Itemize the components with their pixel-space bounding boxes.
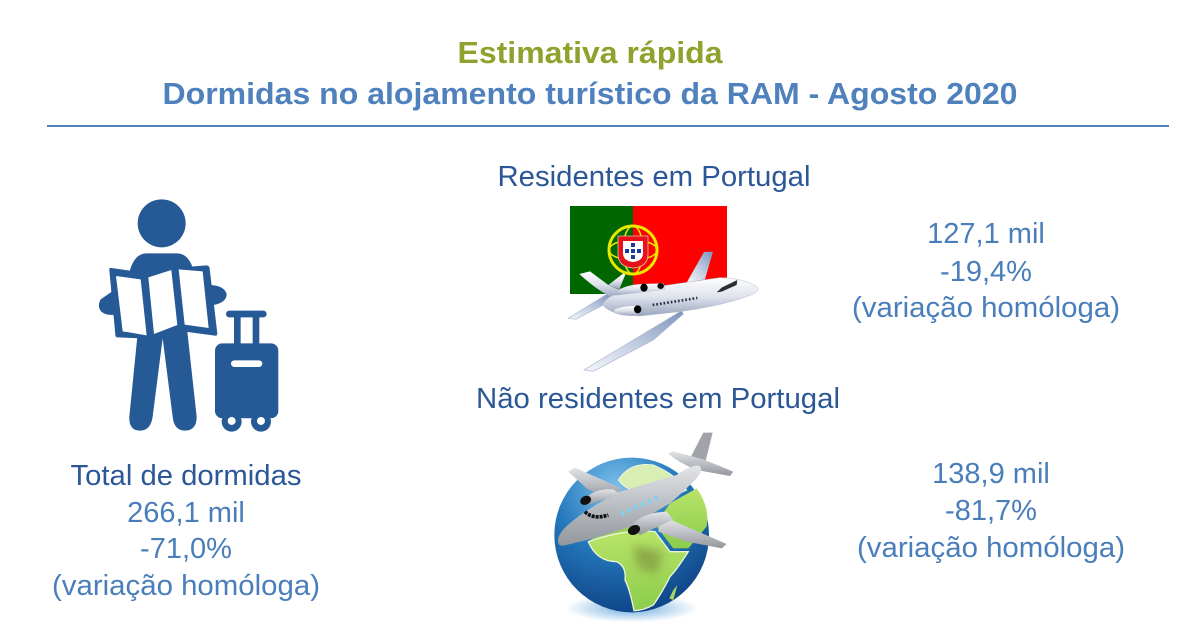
stats: residentes: 127,1 mil xyxy=(927,218,1045,250)
icon: globe with airplane xyxy=(554,433,733,622)
total de dormidas text: 266,1 mil xyxy=(127,497,245,529)
stats: nao residentes: (variação homóloga) xyxy=(857,532,1125,564)
stats: residentes xyxy=(852,218,1120,324)
heading: residentes: Residentes em Portugal xyxy=(498,161,810,193)
stats: nao residentes: -81,7% xyxy=(945,495,1037,527)
total de dormidas text xyxy=(52,460,320,602)
stats: residentes: (variação homóloga) xyxy=(852,292,1120,324)
stats: residentes: -19,4% xyxy=(940,256,1032,288)
icon: jet airplane xyxy=(568,252,758,371)
stats: nao residentes xyxy=(857,458,1125,564)
icon: Portuguese flag xyxy=(570,206,727,294)
total de dormidas text: (variação homóloga) xyxy=(52,570,320,602)
total de dormidas text: Total de dormidas xyxy=(70,460,302,492)
icon: traveller with map and suitcase xyxy=(99,199,278,432)
title: Dormidas no alojamento turístico da RAM - Agosto 2020 xyxy=(162,76,1018,111)
stats: nao residentes: 138,9 mil xyxy=(932,458,1050,490)
total de dormidas text: -71,0% xyxy=(140,533,232,565)
title rule xyxy=(47,125,1169,127)
title: Estimativa rápida xyxy=(458,35,723,70)
heading: nao residentes: Não residentes em Portugal xyxy=(476,383,840,415)
title xyxy=(162,35,1018,111)
